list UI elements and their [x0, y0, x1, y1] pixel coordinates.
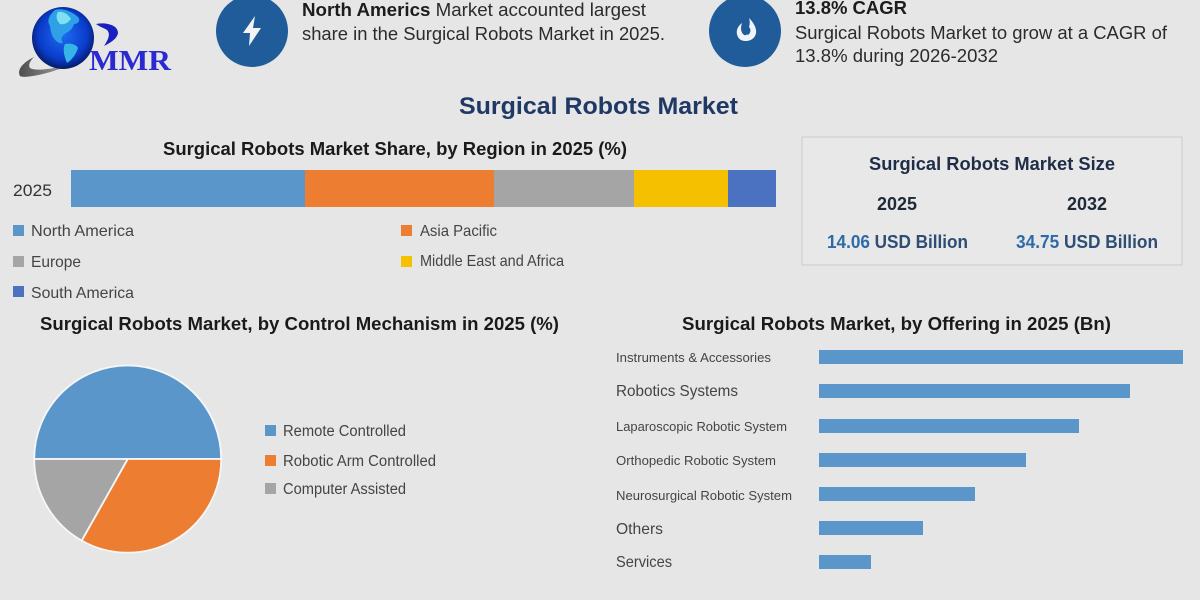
- panel: share by region: [13, 139, 776, 302]
- legend: control mechanism: Robotic Arm Controlled: [283, 453, 436, 470]
- logo: MMR globe: MMR: [89, 45, 172, 77]
- panel: control mechanism: [34, 314, 559, 553]
- callout: CAGR: 13.8% during 2026-2032: [795, 46, 998, 66]
- callout: CAGR: Surgical Robots Market to grow at a CAGR of: [795, 23, 1168, 43]
- stat: 2025: [827, 194, 968, 252]
- bar chart: [819, 350, 1183, 569]
- panel: market size: [802, 137, 1182, 265]
- bar labels: Services: [616, 554, 672, 571]
- bar labels: [616, 350, 792, 571]
- heading: market size: Surgical Robots Market Size: [869, 154, 1115, 174]
- stacked bar chart: [71, 170, 776, 207]
- legend: regions: North America: [31, 223, 134, 240]
- legend: regions: [13, 223, 564, 302]
- icon: CAGR flame badge: [709, 0, 781, 67]
- bar labels: Laparoscopic Robotic System: [616, 419, 787, 434]
- legend: regions: Europe: [31, 254, 81, 271]
- axis label: 2025: 2025: [13, 181, 52, 200]
- heading: share by region: Surgical Robots Market Share, by Region in 2025 (%): [163, 139, 627, 159]
- logo: MMR globe: [19, 7, 172, 77]
- icon: lightning bolt badge: [216, 0, 288, 67]
- title: Surgical Robots Market: [459, 93, 738, 120]
- callout: North America share: North Americs Market accounted largest: [302, 0, 646, 20]
- stat: 2032: 34.75 USD Billion: [1016, 232, 1158, 252]
- bar labels: Instruments & Accessories: [616, 350, 772, 365]
- legend: control mechanism: Remote Controlled: [283, 423, 406, 440]
- panel: by offering: [616, 314, 1183, 571]
- pie chart: [34, 366, 221, 553]
- stat: 2032: [1016, 194, 1158, 252]
- legend: control mechanism: Computer Assisted: [283, 481, 406, 498]
- legend: control mechanism: [265, 423, 436, 498]
- callout: North America share: [302, 0, 665, 44]
- bar labels: Robotics Systems: [616, 383, 738, 400]
- callout: North America share: share in the Surgical Robots Market in 2025.: [302, 24, 665, 44]
- stat: 2032: 2032: [1067, 194, 1107, 214]
- legend: regions: Asia Pacific: [420, 223, 497, 240]
- bar labels: Others: [616, 521, 663, 538]
- stat: 2025: 2025: [877, 194, 917, 214]
- callout: CAGR: [795, 0, 1168, 66]
- legend: regions: Middle East and Africa: [420, 253, 564, 270]
- heading: by offering: Surgical Robots Market, by Offering in 2025 (Bn): [682, 314, 1111, 334]
- bar labels: Orthopedic Robotic System: [616, 453, 776, 468]
- bar labels: Neurosurgical Robotic System: [616, 488, 792, 503]
- stat: 2025: 14.06 USD Billion: [827, 232, 968, 252]
- heading: control mechanism: Surgical Robots Market, by Control Mechanism in 2025 (%): [40, 314, 559, 334]
- legend: regions: South America: [31, 285, 134, 302]
